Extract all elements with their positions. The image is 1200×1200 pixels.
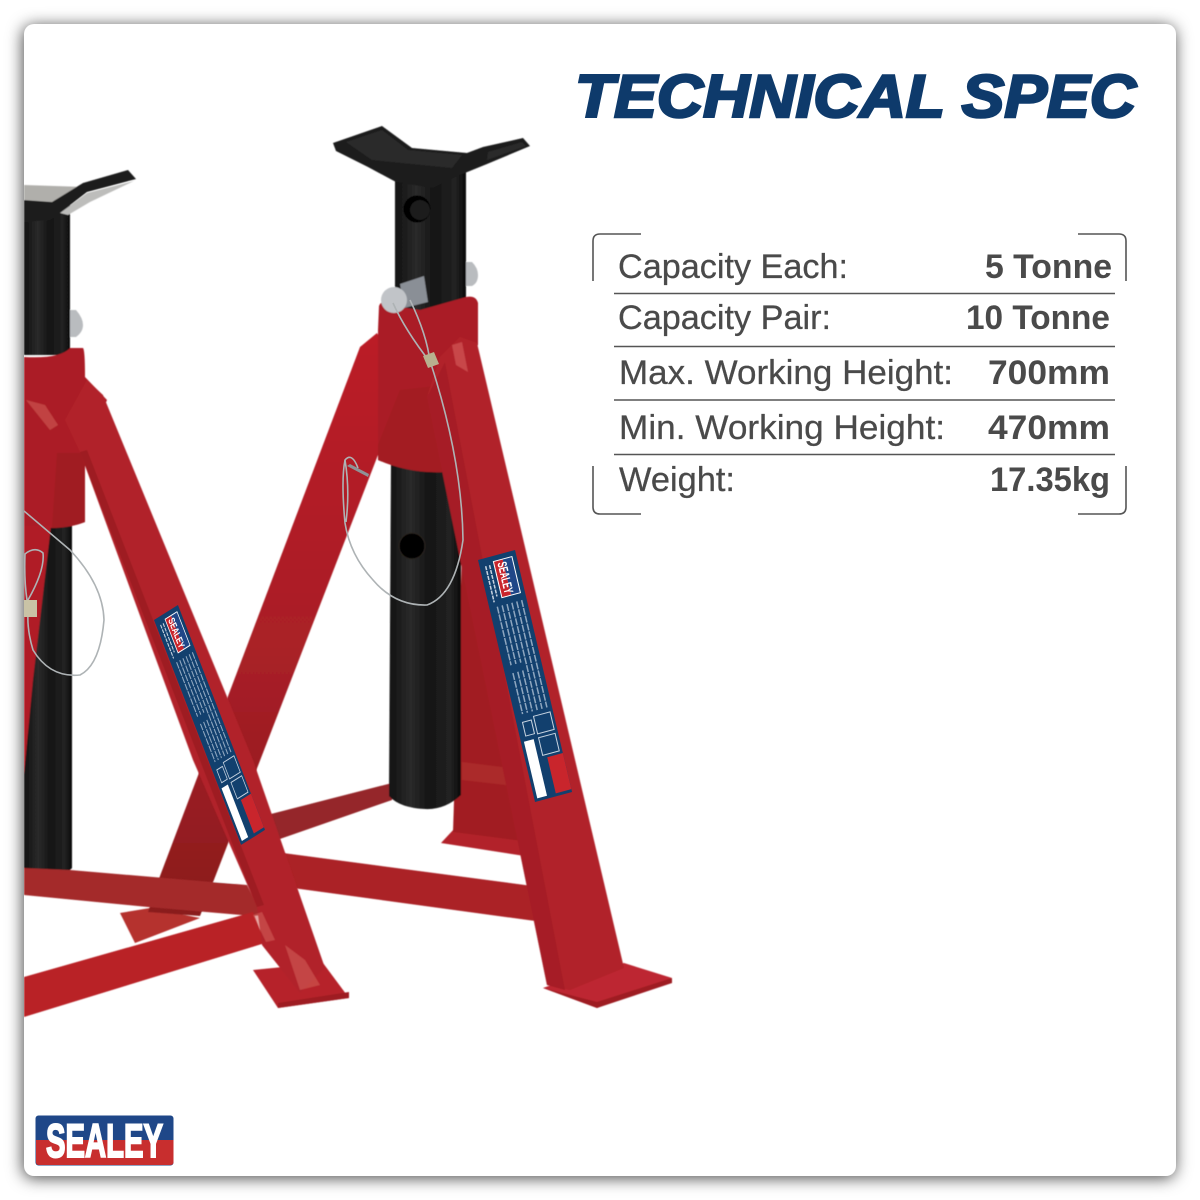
foot [253,963,349,1008]
left tube lower [24,525,72,881]
wire crimps [24,352,439,617]
row: min working height: 470mm [988,409,1110,447]
row: weight [619,461,1110,499]
row: capacity pair: 10 Tonne [966,299,1110,337]
red strip over lower tube [24,526,51,775]
collar and centre body [378,297,478,472]
row: max working height: Max. Working Height: [619,354,953,392]
upper tube hole [404,196,430,222]
front leg side strip [80,450,264,907]
lower collar shade [378,460,442,474]
specification table [593,234,1126,514]
gap between bars [212,881,236,884]
row: weight: 17.35kg [990,461,1110,499]
table corner brackets [593,234,1126,514]
front crossbar [283,853,550,923]
warning label: left stand [154,605,265,845]
row: max working height [619,354,1110,392]
rear crossbar [267,783,392,840]
left leg and foot [120,333,405,943]
row: capacity pair: Capacity Pair: [618,299,831,337]
left tube upper [24,205,70,355]
body panel shading [52,453,85,528]
row: capacity each: 5 Tonne [985,248,1112,286]
Sealey logo [36,1114,174,1167]
mini Sealey logo: SEALEY [166,616,186,651]
mini Sealey logo [493,556,521,598]
lower crossbar [24,912,265,1017]
lower tube hole [399,533,425,559]
title: TECHNICAL SPEC [575,63,1138,130]
mini Sealey logo [165,611,191,653]
row: min working height [619,409,1110,447]
left stand [24,170,349,1017]
mini Sealey logo: SEALEY [494,560,516,595]
row: capacity each: Capacity Each: [618,248,848,286]
row: capacity pair [618,299,1110,337]
Sealey logo: SEALEY [46,1114,163,1167]
rear leg and foot [440,566,522,856]
left collar and body [24,348,107,528]
row: max working height: 700mm [988,354,1110,392]
upper crossbar [24,868,262,916]
retaining wires [24,300,463,675]
front leg and foot [427,337,672,1008]
left saddle [24,170,136,222]
leg highlights [26,400,320,990]
warning label: right stand [478,550,572,802]
product photo: pair of axle stands [24,126,672,1017]
right stand [120,126,672,1008]
upper black tube [395,172,466,312]
locking pin [381,276,428,313]
rear locking pin end [466,262,478,286]
row: weight: Weight: [619,461,735,499]
row: capacity each [618,248,1112,286]
left pin [70,310,83,337]
front leg [84,387,324,968]
saddle [333,126,530,188]
lower black tube [389,460,461,809]
row: min working height: Min. Working Height: [619,409,945,447]
